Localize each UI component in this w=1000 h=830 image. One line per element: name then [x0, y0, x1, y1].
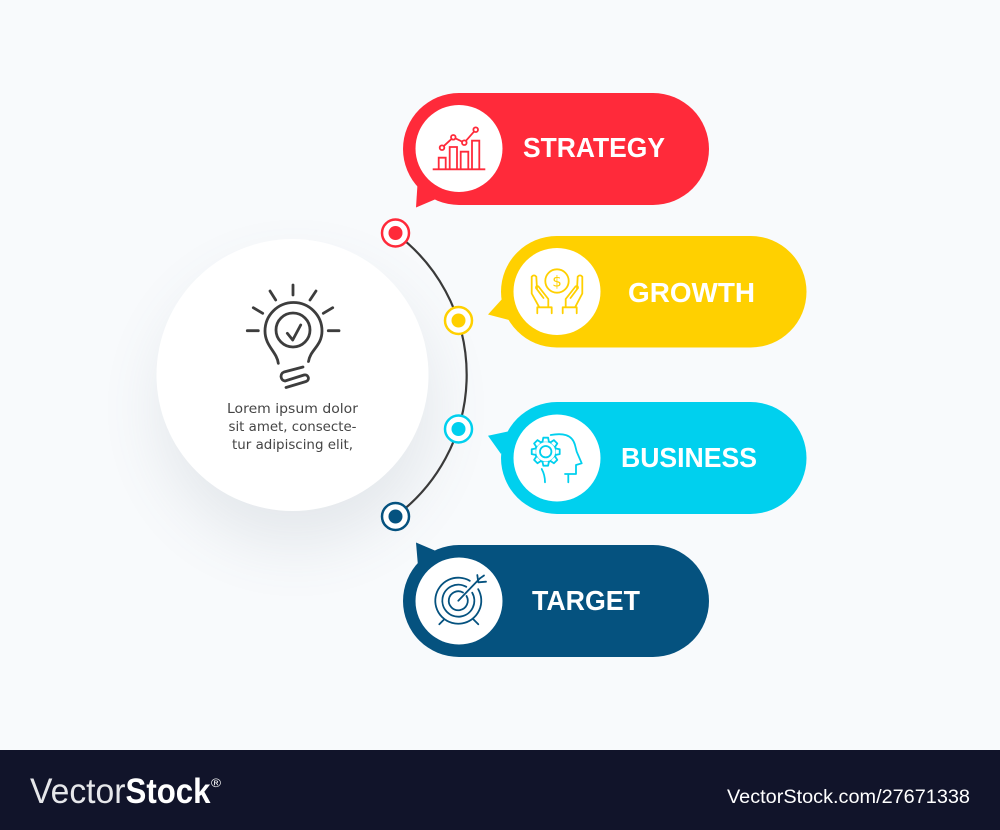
central description text: Lorem ipsum dolor	[227, 401, 358, 417]
footer logo: VectorStock: Stock	[126, 772, 211, 811]
timeline arc	[395, 233, 467, 516]
footer logo: VectorStock: ®	[211, 776, 221, 790]
node: red	[382, 220, 409, 246]
panel: strategy	[403, 93, 709, 208]
panel: target	[403, 542, 709, 657]
node: cyan	[445, 416, 472, 442]
central circle with shadow	[156, 239, 434, 546]
footer image id: VectorStock.com/27671338	[727, 786, 970, 808]
label: strategy: STRATEGY	[523, 132, 665, 163]
central lightbulb icon	[247, 285, 339, 388]
central description text: tur adipiscing elit,	[232, 437, 353, 453]
footer bar	[0, 750, 1000, 830]
panel: business	[488, 402, 806, 514]
panel: growth	[488, 236, 806, 348]
node: navy	[382, 503, 409, 530]
icon: bar chart	[433, 127, 485, 169]
label: business: BUSINESS	[621, 442, 757, 473]
icon: hands holding coin	[532, 269, 582, 313]
footer logo: VectorStock: Vector	[30, 772, 126, 811]
central description text: sit amet, consecte-	[228, 419, 357, 435]
footer logo: VectorStock	[30, 772, 221, 811]
icon: head with gear	[532, 434, 582, 482]
label: growth: GROWTH	[628, 277, 755, 308]
label: target: TARGET	[532, 585, 640, 616]
icon: target with arrow	[435, 575, 486, 624]
node: yellow	[445, 307, 472, 334]
icon: dollar sign: $	[552, 272, 562, 290]
